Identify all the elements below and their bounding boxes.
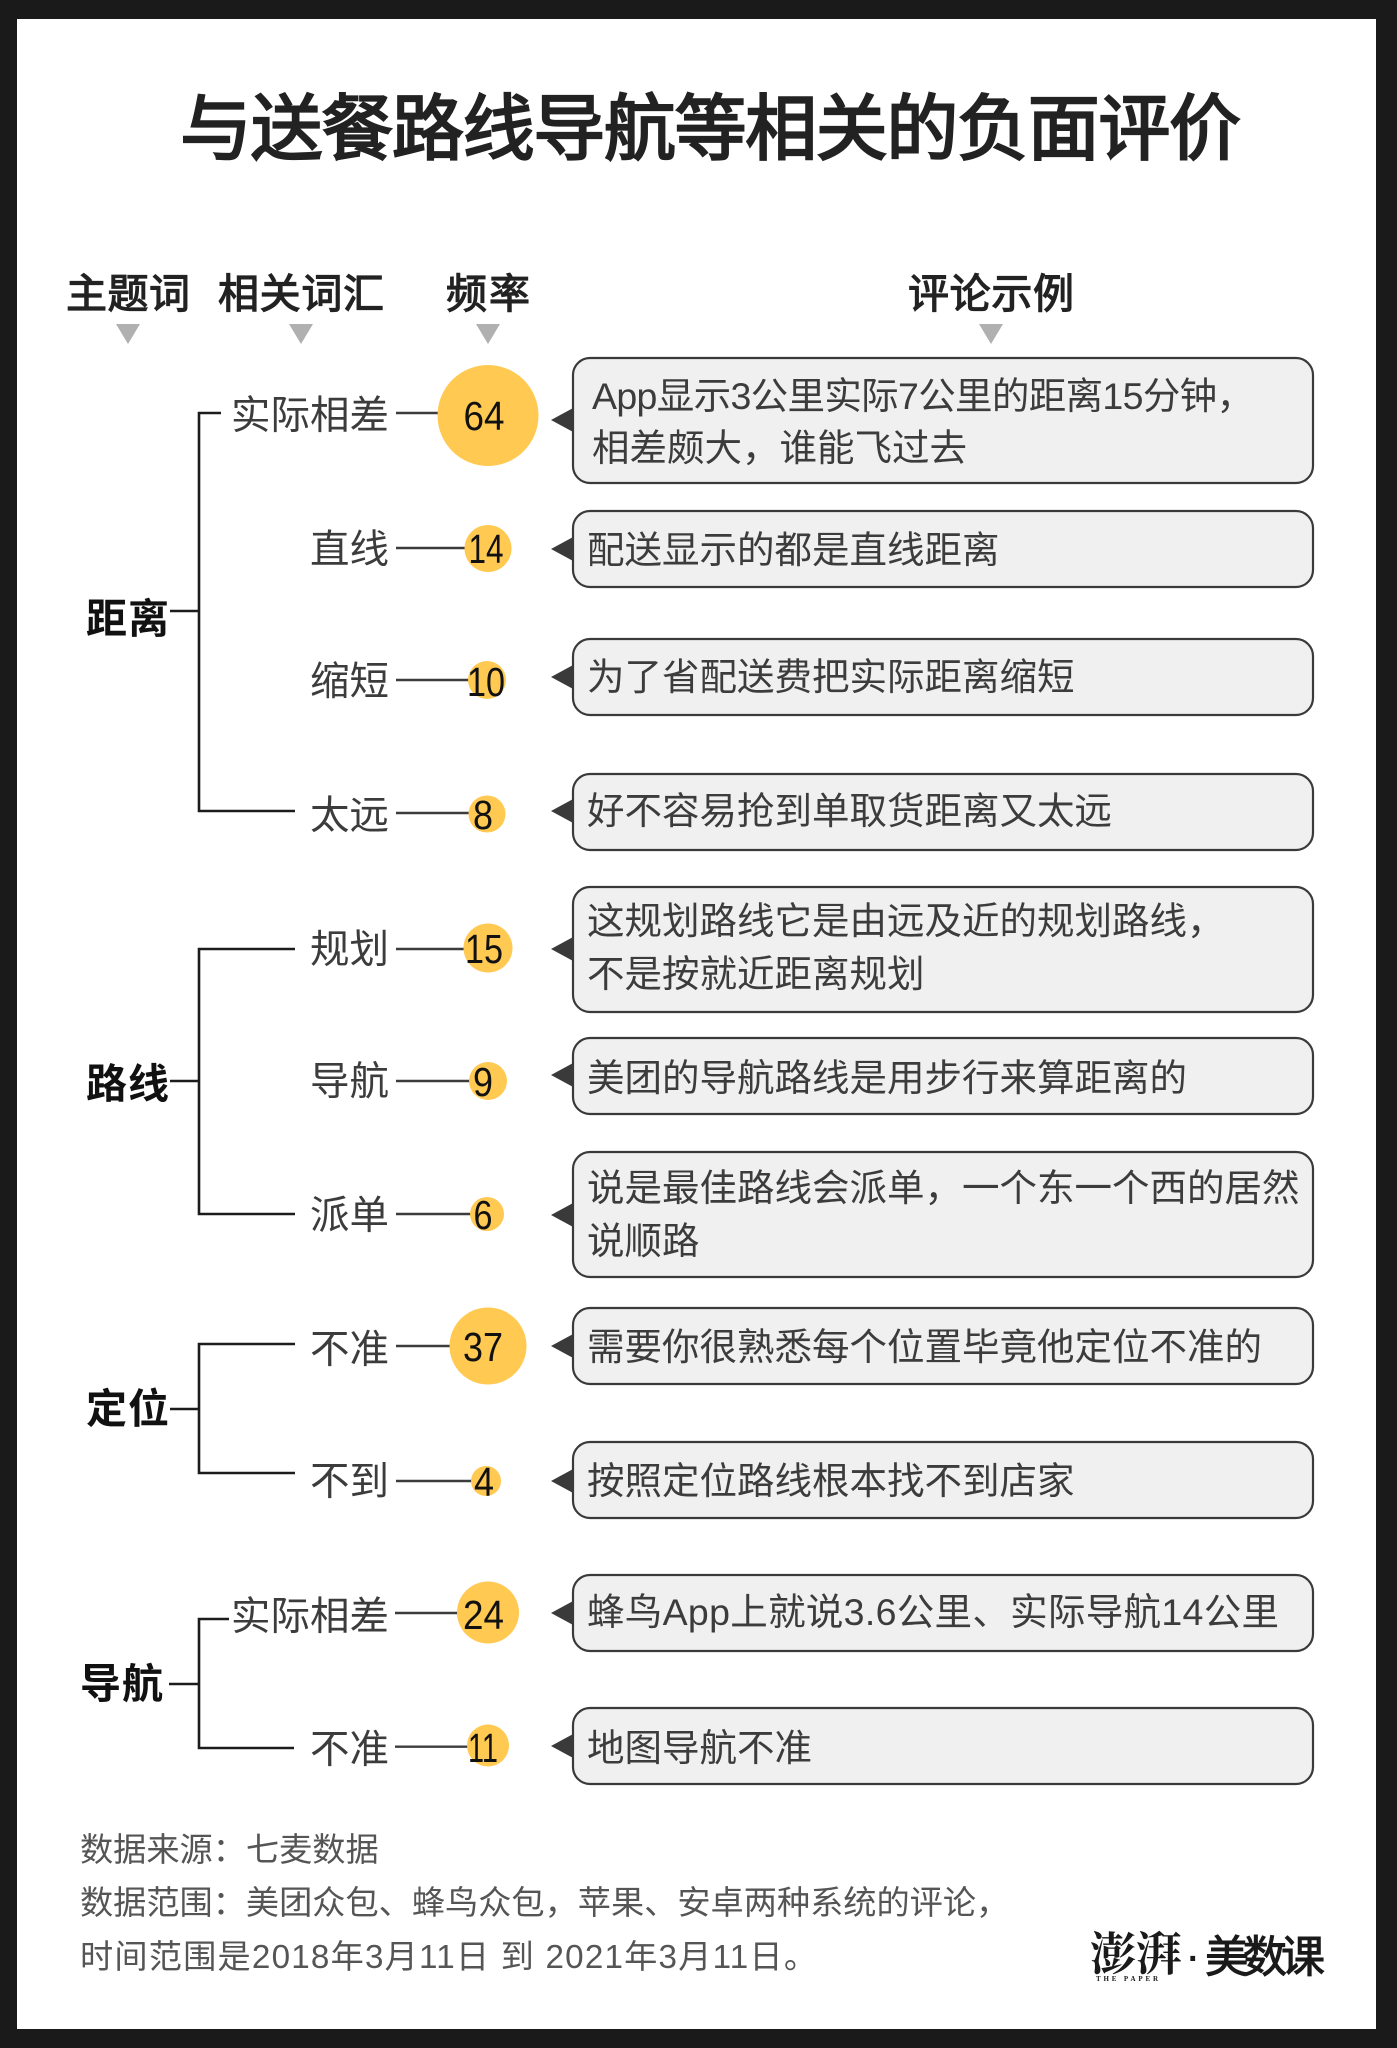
row: 不准 37 xyxy=(310,1308,1313,1384)
header: 主题词: 主题词 xyxy=(66,271,190,317)
row: 实际相差 24: 蜂鸟App上就说3.6公里、实际导航14公里 xyxy=(587,1591,1279,1633)
header: 相关词汇: 相关词汇 xyxy=(218,271,384,317)
row: 直线 14: 直线 xyxy=(310,528,389,572)
topic label: 导航: 导航 xyxy=(80,1661,163,1707)
row: 导航 9: 美团的导航路线是用步行来算距离的 xyxy=(587,1057,1187,1099)
header: 评论示例 xyxy=(908,271,1074,344)
row: 缩短 10 xyxy=(310,639,1313,715)
row: 导航 9 xyxy=(310,1038,1313,1114)
bracket: 导航 xyxy=(169,1619,294,1748)
footer: data source notes: 时间范围是2018年3月11日 到 2021年3月11日。 xyxy=(80,1939,817,1976)
row: 不到 4: 4 xyxy=(474,1459,494,1505)
row: 派单 6: 派单 xyxy=(310,1194,389,1238)
topic label: 路线: 路线 xyxy=(86,1061,169,1107)
row: 不到 4: 按照定位路线根本找不到店家 xyxy=(587,1460,1074,1502)
row: 实际相差 24 xyxy=(231,1575,1313,1651)
row: 不准 11: 11 xyxy=(468,1725,498,1771)
header: 评论示例: 评论示例 xyxy=(908,271,1074,317)
row: 不准 37: 37 xyxy=(463,1324,503,1370)
row: 派单 6 xyxy=(310,1152,1313,1277)
row: 太远 8 xyxy=(310,774,1313,850)
row: 不准 11 xyxy=(310,1708,1313,1784)
header: 频率 xyxy=(446,271,530,344)
row: 缩短 10: 为了省配送费把实际距离缩短 xyxy=(587,656,1074,698)
group: 路线 xyxy=(86,887,1313,1277)
row: 不到 4 xyxy=(310,1442,1313,1518)
footer: data source notes: 数据来源：七麦数据 xyxy=(80,1832,379,1869)
row: 缩短 10: 缩短 xyxy=(310,660,389,704)
row: 缩短 10: 10 xyxy=(467,659,505,705)
row: 规划 15: 这规划路线它是由远及近的规划路线， xyxy=(587,900,1224,942)
row: 规划 15: 15 xyxy=(465,926,503,972)
row: 实际相差 64: 实际相差 xyxy=(231,394,389,438)
row: 实际相差 64: App显示3公里实际7公里的距离15分钟， xyxy=(592,375,1254,417)
row: 派单 6: 说是最佳路线会派单，一个东一个西的居然 xyxy=(587,1167,1300,1209)
row: 实际相差 64: 64 xyxy=(464,393,504,439)
topic label: 距离: 距离 xyxy=(86,596,169,642)
group: 定位 xyxy=(86,1308,1313,1518)
bracket: 路线 xyxy=(170,949,295,1214)
row: 不准 11: 不准 xyxy=(310,1728,389,1772)
group: 导航 xyxy=(80,1575,1313,1784)
row: 不到 4: 不到 xyxy=(310,1460,389,1504)
row: 实际相差 24: 24 xyxy=(463,1592,504,1638)
footer: data source notes xyxy=(80,1832,1009,1976)
header: 频率: 频率 xyxy=(446,271,530,317)
row: 不准 11: 地图导航不准 xyxy=(587,1727,812,1769)
row: 实际相差 64: 相差颇大，谁能飞过去 xyxy=(592,427,967,469)
row: 派单 6: 6 xyxy=(474,1192,492,1238)
topic label: 定位: 定位 xyxy=(86,1386,169,1432)
bracket: 定位 xyxy=(170,1344,295,1473)
row: 实际相差 24: 实际相差 xyxy=(231,1595,389,1639)
row: 导航 9: 9 xyxy=(473,1059,493,1105)
row: 直线 14: 配送显示的都是直线距离 xyxy=(587,529,1000,571)
logo: The Paper 美数课: 美数课 xyxy=(1205,1921,1325,1985)
header: 主题词 xyxy=(66,271,190,344)
title: 与送餐路线导航等相关的负面评价 xyxy=(180,90,1241,170)
row: 直线 14 xyxy=(310,511,1313,587)
row: 太远 8: 好不容易抢到单取货距离又太远 xyxy=(587,790,1112,832)
logo: The Paper 美数课: 澎湃 xyxy=(1090,1918,1182,1984)
logo: The Paper 美数课: THE PAPER xyxy=(1096,1975,1159,1983)
column headers xyxy=(66,271,1074,344)
row: 规划 15: 规划 xyxy=(310,928,389,972)
row: 直线 14: 14 xyxy=(468,526,504,572)
row: 导航 9: 导航 xyxy=(310,1060,389,1104)
row: 太远 8: 太远 xyxy=(310,794,389,838)
group: 距离 xyxy=(86,358,1313,850)
row: 不准 37: 需要你很熟悉每个位置毕竟他定位不准的 xyxy=(587,1326,1262,1368)
logo: The Paper 美数课: · xyxy=(1188,1940,1199,1978)
row: 不准 37: 不准 xyxy=(310,1328,389,1372)
row: 实际相差 64 xyxy=(231,358,1313,483)
footer: data source notes: 数据范围：美团众包、蜂鸟众包，苹果、安卓两种系统的评论， xyxy=(80,1885,1009,1922)
row: 太远 8: 8 xyxy=(473,792,493,838)
logo: The Paper 美数课 xyxy=(1090,1918,1325,1985)
row: 规划 15 xyxy=(310,887,1313,1012)
row: 规划 15: 不是按就近距离规划 xyxy=(587,953,924,995)
header: 相关词汇 xyxy=(218,271,384,344)
row: 派单 6: 说顺路 xyxy=(587,1220,700,1262)
bracket: 距离 xyxy=(170,413,295,811)
